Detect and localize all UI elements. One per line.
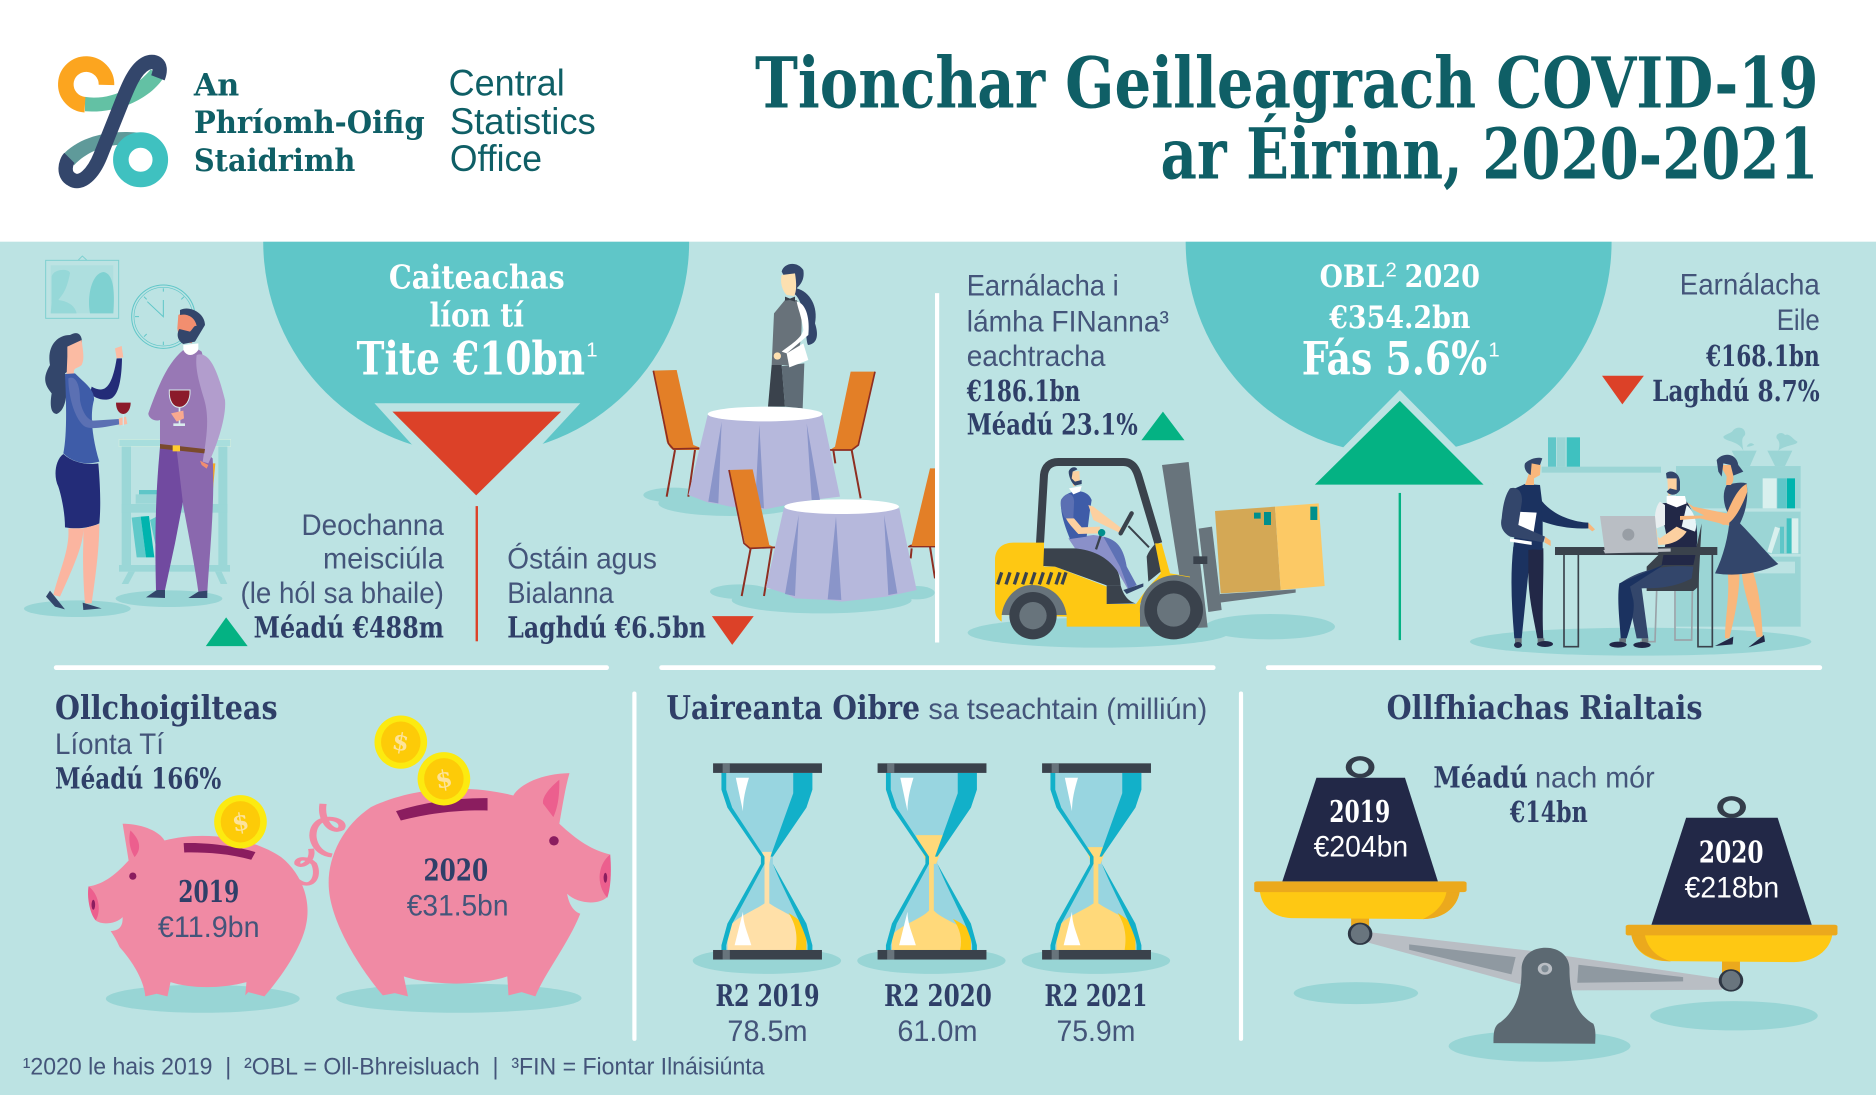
panel: GVA: [966, 242, 1820, 640]
label: 2020 debt: 2020: [1699, 836, 1764, 871]
heading: GVA: 1: [1488, 340, 1500, 362]
text: increase callout: [1433, 760, 1655, 829]
text: hotels and restaurants: Bialanna: [507, 577, 614, 610]
icon: hourglass R2 2020: [857, 763, 1006, 974]
icon: hourglass R2 2021: [1022, 763, 1170, 974]
divider line: red: [476, 506, 478, 641]
logo text: Irish name: [193, 68, 425, 179]
heading: hours worked: Uaireanta Oibre: [666, 689, 920, 727]
vertical divider: top section: [935, 293, 939, 642]
heading: GVA: [1302, 259, 1500, 385]
heading: GVA: Fás 5.6%: [1302, 331, 1487, 385]
labels: hours worked values: R2 2019: [715, 979, 820, 1014]
heading: GVA: OBL: [1320, 259, 1384, 295]
text: increase callout: nach mór: [1535, 761, 1655, 794]
panel: government debt: [1254, 689, 1837, 1062]
logo text: English name: Statistics: [450, 100, 596, 142]
text: alcohol: Deochanna: [302, 509, 444, 542]
text: alcohol: [240, 509, 444, 645]
labels: hours worked values: [715, 979, 1147, 1048]
coin symbols: [230, 727, 455, 838]
labels: hours worked values: 78.5m: [727, 1015, 808, 1048]
label: 2019 debt: 2019: [1329, 795, 1390, 830]
illustration: forklift: [968, 462, 1335, 648]
illustration: office meeting: [1470, 428, 1811, 656]
text: alcohol: Méadú €488m: [254, 611, 444, 645]
label: 2020 savings: [407, 854, 508, 922]
text: increase callout: Méadú: [1433, 760, 1528, 794]
text: foreign-owned MNE sectors: Méadú 23.1%: [967, 407, 1138, 441]
footnote: ¹2020 le hais 2019 | ²OBL = Oll-Bhreisluach | ³FIN = Fiontar Ilnáisiúnta: [23, 1053, 765, 1080]
icon: hourglass R2 2019: [693, 763, 841, 974]
heading: savings: [55, 689, 278, 795]
text: hotels and restaurants: [507, 542, 706, 645]
text: increase callout: €14bn: [1509, 795, 1588, 829]
illustration: couple with wine: [24, 256, 231, 617]
semicircle: household spending: [263, 242, 689, 455]
text: other sectors: Earnálacha: [1680, 268, 1820, 301]
logo text: Irish name: An: [193, 68, 239, 104]
heading: GVA: €354.2bn: [1328, 300, 1470, 336]
heading: hours worked: [666, 689, 1207, 727]
heading: GVA: 2: [1385, 259, 1397, 281]
horizontal dividers: [54, 665, 1822, 1041]
logo text: English name: Office: [450, 137, 542, 179]
heading: GVA: 2020: [1405, 259, 1480, 295]
logo: Central Statistics Office: [62, 62, 596, 181]
heading: household spending: 1: [586, 340, 598, 362]
panel: household savings: [55, 689, 611, 1013]
heading: household spending: [357, 258, 598, 385]
illustration: restaurant tables and waitress: [643, 264, 935, 613]
label: 2020 savings: €31.5bn: [407, 889, 508, 922]
icon: red down triangle: [712, 616, 754, 645]
heading: household spending: Tite €10bn: [357, 331, 585, 385]
text: alcohol: (le hól sa bhaile): [240, 577, 444, 610]
label: 2020 debt: €218bn: [1685, 871, 1779, 904]
label: 2020 savings: 2020: [424, 854, 488, 889]
label: 2020 debt: [1685, 836, 1779, 904]
heading: hours worked: sa tseachtain (milliún): [928, 693, 1207, 726]
text: foreign-owned MNE sectors: eachtracha: [967, 340, 1106, 373]
label: 2019 debt: [1314, 795, 1408, 864]
semicircle: GVA: [1186, 242, 1612, 455]
heading: government debt: Ollfhiachas Rialtais: [1387, 689, 1703, 727]
text: alcohol: meisciúla: [323, 542, 444, 575]
text: hotels and restaurants: Óstáin agus: [507, 542, 657, 575]
label: 2019 savings: [158, 875, 260, 944]
text: foreign-owned MNE sectors: [966, 270, 1169, 441]
labels: hours worked values: 75.9m: [1056, 1015, 1135, 1048]
icon: green up triangle: [1141, 412, 1184, 440]
logo text: English name: [449, 62, 596, 179]
label: 2019 savings: €11.9bn: [158, 911, 260, 944]
icon: green up triangle: [206, 617, 248, 646]
coin symbols: $: [230, 807, 251, 838]
icon: red down triangle: [1602, 376, 1644, 404]
illustration: balance scales: [1254, 756, 1837, 1062]
labels: hours worked values: R2 2020: [884, 979, 992, 1014]
icon: logo knot: [62, 62, 163, 181]
label: 2019 savings: 2019: [178, 875, 239, 910]
labels: hours worked values: 61.0m: [897, 1015, 977, 1048]
panel: household spending: [206, 242, 754, 646]
heading: savings: Ollchoigilteas: [55, 689, 278, 727]
icon: piggy bank 2020: [313, 715, 611, 1013]
coin symbols: $: [390, 727, 411, 757]
labels: hours worked values: R2 2021: [1044, 979, 1147, 1014]
heading: savings: Líonta Tí: [55, 728, 165, 761]
heading: savings: Méadú 166%: [55, 761, 221, 795]
panel: hours worked: [666, 689, 1207, 1048]
arrow: spending down: [374, 403, 580, 516]
logo text: Irish name: Phríomh-Oifig: [194, 105, 425, 141]
text: other sectors: Laghdú 8.7%: [1652, 374, 1820, 408]
text: foreign-owned MNE sectors: lámha FINanna³: [967, 305, 1169, 338]
text: hotels and restaurants: Laghdú €6.5bn: [507, 611, 706, 645]
arrow: GVA up: [1298, 390, 1502, 493]
text: foreign-owned MNE sectors: €186.1bn: [966, 374, 1080, 408]
title: [755, 42, 1819, 195]
text: other sectors: Eile: [1777, 304, 1820, 337]
logo text: Irish name: Staidrimh: [194, 143, 355, 179]
text: foreign-owned MNE sectors: Earnálacha i: [967, 270, 1119, 303]
text: other sectors: [1652, 268, 1820, 408]
logo text: English name: Central: [449, 62, 565, 104]
heading: household spending: Caiteachas: [389, 258, 565, 296]
coin symbols: $: [433, 764, 455, 794]
divider line: green: [1399, 493, 1401, 640]
icon: piggy bank 2019: [88, 795, 316, 1013]
heading: household spending: líon tí: [430, 297, 524, 335]
text: other sectors: €168.1bn: [1705, 339, 1820, 373]
label: 2019 debt: €204bn: [1314, 831, 1408, 864]
